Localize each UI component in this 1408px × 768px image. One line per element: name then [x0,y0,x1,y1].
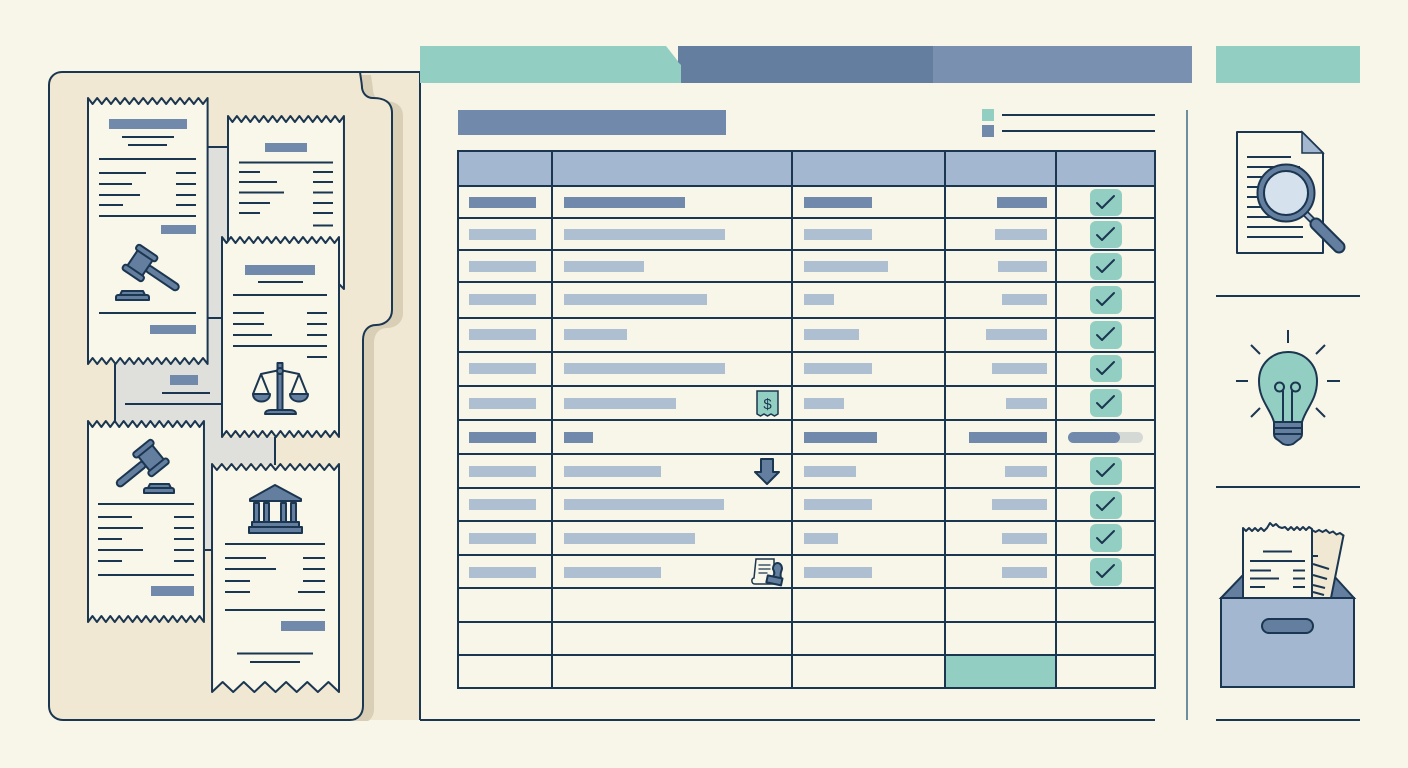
icon: scales of justice [253,363,308,414]
check 7 [1090,389,1122,417]
check 1 [1090,189,1122,216]
check 5 [1090,321,1122,349]
row 6 bars [469,363,1047,374]
receipt: lower left with gavel [88,421,204,622]
row 11 bars [469,533,1047,544]
table header row [458,151,1155,186]
header tab: teal [420,46,681,83]
right column separator [1186,110,1188,720]
legend [982,109,1155,137]
grey back receipt [115,147,275,550]
icon: gavel [108,439,174,497]
receipt: centre with scales [222,237,339,437]
receipt: top right behind [228,116,344,289]
table bottom rule [420,719,1155,721]
progress bar [1068,432,1143,443]
table [458,150,1155,689]
row 10 bars [469,499,1047,510]
receipt: top left with gavel [88,98,208,364]
icon: receipt with dollar [757,391,778,416]
header tab: right teal [1216,46,1360,83]
header tab: dark blue [678,46,933,83]
check 3 [1090,253,1122,280]
row 5 bars [469,329,1047,340]
row 4 bars [469,294,1047,305]
row 1 bars [469,197,1047,208]
check 11 [1090,558,1122,586]
row 7 bars [469,398,1047,409]
right column dividers [1216,296,1360,720]
icon: document with magnifier [1237,132,1339,253]
icon: gavel [116,244,187,301]
icon: box of receipts [1221,523,1354,687]
table grid [458,150,1155,689]
check 4 [1090,286,1122,314]
receipt: lower right with bank [212,464,339,692]
check 9 [1090,491,1122,519]
row 12 bars [469,567,1047,578]
header tab: mid blue [933,46,1192,83]
icon: light bulb [1236,330,1340,445]
check 6 [1090,355,1122,382]
table title bar [458,110,726,135]
panel: receipt folder [49,72,420,727]
row 9 bars [469,466,1047,477]
icon: document with stamp [752,559,782,585]
row 3 bars [469,261,1047,272]
icon: bank building [249,485,302,533]
icon: down arrow [755,459,779,484]
check 2 [1090,221,1122,248]
teal total cell [945,655,1056,688]
check 8 [1090,457,1122,485]
row 2 bars [469,229,1047,240]
row 8 bars [469,432,1047,443]
icon: receipt with dollar: $ [763,396,772,413]
check 10 [1090,524,1122,552]
